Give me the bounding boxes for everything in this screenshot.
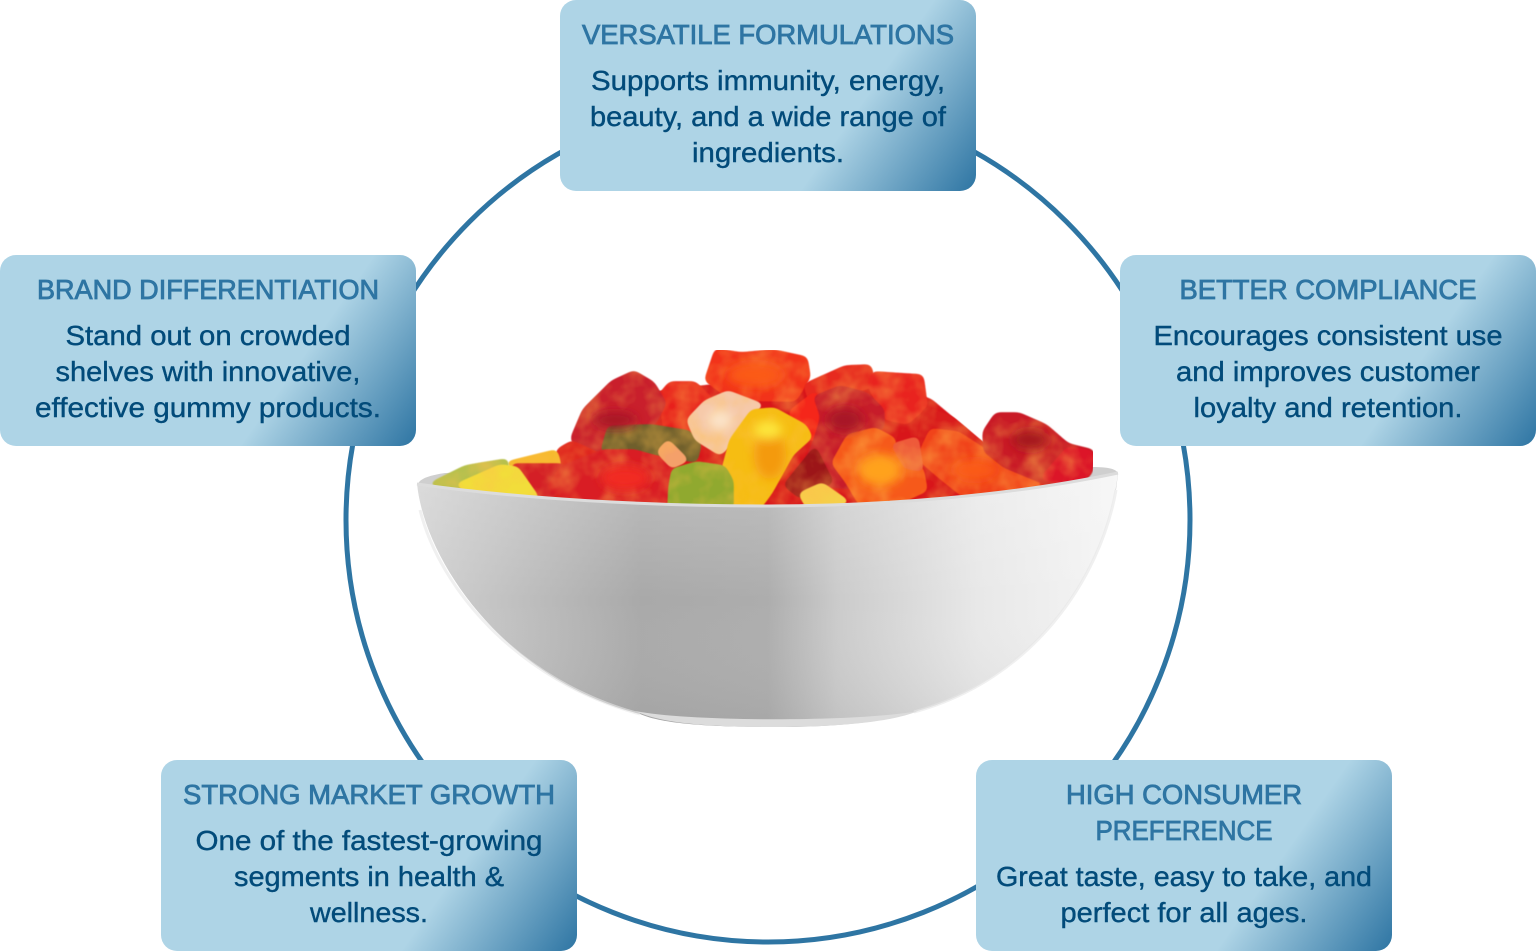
body text: Stand out on crowded <box>66 320 350 351</box>
body text <box>590 65 946 168</box>
body text: Supports immunity, energy, <box>591 65 945 96</box>
body text: segments in health & <box>234 861 504 892</box>
body text: beauty, and a wide range of <box>590 101 946 132</box>
body text: Great taste, easy to take, and <box>996 861 1372 892</box>
body text: perfect for all ages. <box>1060 897 1308 928</box>
body text: Encourages consistent use <box>1154 320 1502 351</box>
body text: effective gummy products. <box>35 392 381 423</box>
gummy shading <box>593 363 1048 490</box>
bowl of gummy bears <box>417 350 1118 727</box>
body text: One of the fastest-growing <box>196 825 542 856</box>
heading: VERSATILE FORMULATIONS <box>582 19 954 50</box>
heading: BETTER COMPLIANCE <box>1180 274 1476 305</box>
heading: PREFERENCE <box>1096 815 1272 846</box>
heading: BRAND DIFFERENTIATION <box>37 274 379 305</box>
bowl edge highlight <box>420 490 1116 714</box>
bowl body <box>417 472 1118 727</box>
body text: ingredients. <box>692 137 844 168</box>
connecting circle <box>346 98 1190 942</box>
body text: and improves customer <box>1176 356 1480 387</box>
body text <box>996 861 1372 928</box>
card: better compliance <box>1120 255 1536 446</box>
card: versatile formulations <box>560 0 976 191</box>
body text <box>196 825 542 928</box>
card: high consumer preference <box>976 760 1392 951</box>
gummy bears <box>431 350 1093 510</box>
heading: HIGH CONSUMER <box>1066 779 1302 810</box>
bowl rim highlight <box>417 473 1118 506</box>
card: brand differentiation <box>0 255 416 446</box>
heading <box>1066 779 1302 846</box>
bowl back rim <box>418 467 1118 490</box>
body text: wellness. <box>309 897 428 928</box>
heading: STRONG MARKET GROWTH <box>183 779 555 810</box>
body text <box>1154 320 1502 423</box>
body text: shelves with innovative, <box>56 356 360 387</box>
body text: loyalty and retention. <box>1194 392 1462 423</box>
bowl foot <box>635 711 918 727</box>
body text <box>35 320 381 423</box>
card: strong market growth <box>161 760 577 951</box>
